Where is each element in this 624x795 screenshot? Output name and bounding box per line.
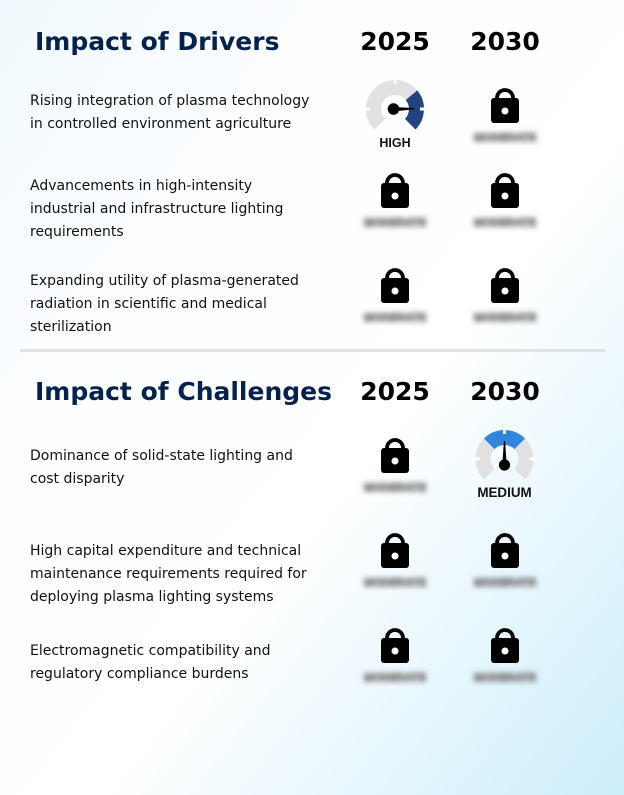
challenge text 2: deploying plasma lighting systems	[30, 589, 274, 605]
lock: driver 3, 2025: MODERATE	[364, 312, 426, 324]
driver text 2: Advancements in high-intensity	[30, 178, 252, 194]
lock: driver 3, 2025	[364, 270, 426, 324]
driver text 2: requirements	[30, 224, 124, 240]
driver text 2: industrial and infrastructure lighting	[30, 201, 283, 217]
gauge: medium: MEDIUM	[477, 485, 532, 500]
driver text 3: radiation in scientific and medical	[30, 296, 267, 312]
gauge: high: HIGH	[379, 136, 411, 150]
lock: driver 2, 2030	[474, 175, 536, 229]
lock: challenge 2, 2030: MODERATE	[474, 577, 536, 589]
lock: challenge 2, 2025	[364, 535, 426, 589]
lock: driver 1, 2030: MODERATE	[474, 132, 536, 144]
challenge text 1: Dominance of solid-state lighting and	[30, 448, 293, 464]
driver text 3: Expanding utility of plasma-generated	[30, 273, 299, 289]
heading: challenges: Impact of Challenges	[35, 377, 332, 406]
driver text 1: in controlled environment agriculture	[30, 116, 291, 132]
lock: driver 2, 2030: MODERATE	[474, 217, 536, 229]
year: 2025: 2025	[360, 377, 430, 406]
lock: driver 1, 2030	[474, 90, 536, 144]
challenge text 3: Electromagnetic compatibility and	[30, 643, 271, 659]
challenge text 3: regulatory compliance burdens	[30, 666, 249, 682]
lock: challenge 2, 2025: MODERATE	[364, 577, 426, 589]
lock: driver 2, 2025	[364, 175, 426, 229]
challenge text 2: High capital expenditure and technical	[30, 543, 301, 559]
challenge text 1: cost disparity	[30, 471, 124, 487]
lock: driver 3, 2030	[474, 270, 536, 324]
lock: challenge 2, 2030	[474, 535, 536, 589]
challenge text 2: maintenance requirements required for	[30, 566, 307, 582]
lock: challenge 3, 2025: MODERATE	[364, 672, 426, 684]
driver text 1: Rising integration of plasma technology	[30, 93, 309, 109]
year: 2025: 2025	[360, 27, 430, 56]
lock: challenge 1, 2025	[364, 440, 426, 494]
gauge: high	[365, 79, 425, 150]
lock: challenge 3, 2030: MODERATE	[474, 672, 536, 684]
lock: challenge 1, 2025: MODERATE	[364, 482, 426, 494]
lock: driver 3, 2030: MODERATE	[474, 312, 536, 324]
lock: challenge 3, 2030	[474, 630, 536, 684]
lock: challenge 3, 2025	[364, 630, 426, 684]
gauge: medium	[474, 429, 534, 500]
driver text 3: sterilization	[30, 319, 112, 335]
year: 2030: 2030	[470, 27, 540, 56]
lock: driver 2, 2025: MODERATE	[364, 217, 426, 229]
year: 2030: 2030	[470, 377, 540, 406]
heading: drivers: Impact of Drivers	[35, 27, 279, 56]
